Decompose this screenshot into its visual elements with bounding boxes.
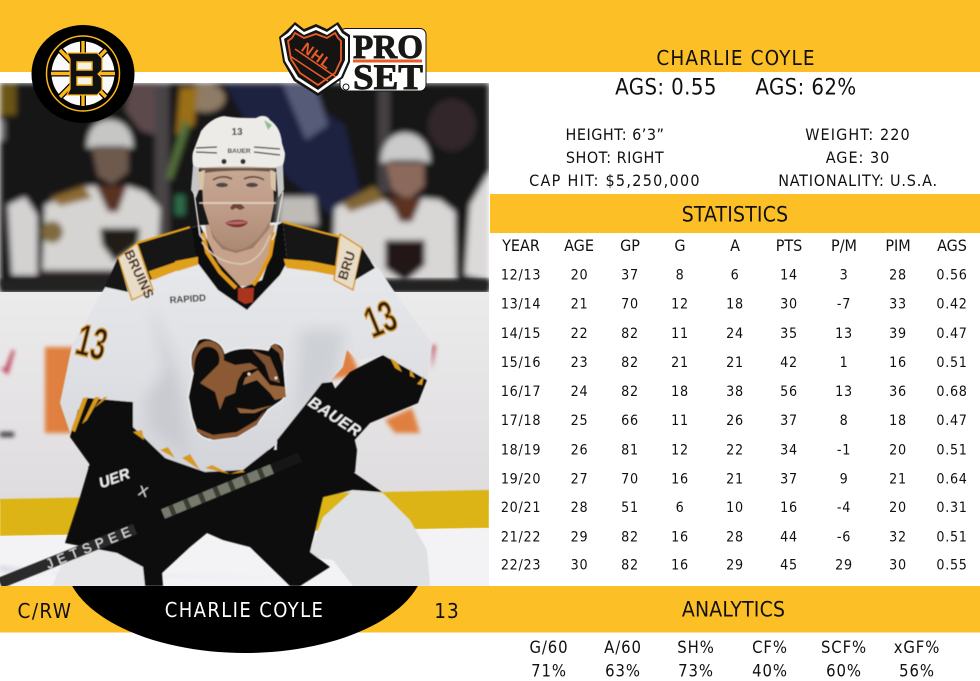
table rows: 15/16 [501,355,541,371]
table rows: 21 [726,472,744,488]
table rows: 9 [840,472,848,488]
table rows: 21 [726,355,744,371]
table rows: 13 [835,384,853,400]
orange rule [353,60,422,62]
helmet number: 13 [231,127,243,138]
analytics values: A/60 [604,638,642,657]
table rows: 29 [571,530,588,546]
yoke gold stripes [137,222,340,279]
boards adverts [0,345,436,437]
table rows: -6 [837,530,851,546]
cage straps [194,192,283,240]
table rows: 29 [726,558,744,574]
table rows: 26 [571,442,588,458]
table rows: 37 [780,413,798,429]
table rows: 0.51 [936,530,968,546]
table header: PIM [885,236,911,255]
table rows: 6 [731,268,739,284]
table header: PTS [776,236,802,255]
collar gold trim [203,232,274,288]
table rows: 82 [621,355,639,371]
table rows: 22 [571,326,588,342]
right glove [276,382,358,474]
stick brand: JETSPEE [44,524,133,572]
table rows: 16 [889,355,907,371]
table rows: 0.51 [936,442,968,458]
table rows: 14/15 [501,326,541,342]
headline AGS values: AGS: 0.55 [615,76,717,100]
face [198,165,276,253]
table rows: 25 [571,413,588,429]
table rows: 29 [835,558,853,574]
table rows: 8 [676,268,684,284]
hockey stick [0,457,300,583]
boards [0,292,489,502]
table rows: 18 [889,413,907,429]
table rows: 28 [889,268,907,284]
table rows: 30 [571,558,588,574]
neck [205,225,275,286]
table header: AGE [564,236,594,255]
table rows: 70 [621,296,639,312]
sleeve number right: 13 [357,291,404,348]
table rows: 42 [780,355,798,371]
table rows: 70 [621,472,639,488]
table rows: 3 [840,268,848,284]
blurred teammate right [381,133,430,163]
table rows: 18 [671,384,689,400]
analytics values: SH% [677,638,715,657]
table rows: 20 [571,268,588,284]
helmet brand: BAUER [227,148,251,155]
table header: YEAR [501,236,540,255]
player bio left: SHOT: RIGHT [566,148,664,167]
sleeve number left: 13 [71,314,112,370]
yellow kick plate [0,490,489,536]
position label: C/RW [18,599,72,623]
registered mark [343,84,349,90]
collar black [190,222,287,310]
player bio left [529,125,701,190]
SET wordmark: SET [353,57,423,97]
table header: G [674,236,686,255]
jersey shading [146,328,344,446]
statistics heading: STATISTICS [682,202,788,226]
player bio left: CAP HIT: $5,250,000 [529,171,701,190]
table rows: 37 [621,268,639,284]
analytics values: SCF% [821,638,867,657]
table rows: 12/13 [501,268,541,284]
player figure: X [137,482,151,500]
player name heading: CHARLIE COYLE [656,46,816,70]
jersey [60,222,432,473]
table rows: 0.51 [936,355,968,371]
white pants left [52,549,146,586]
table rows: 0.55 [936,558,968,574]
bottom yellow band [0,586,980,632]
table rows: 8 [840,413,848,429]
player bio right: AGE: 30 [826,148,890,167]
team logo: Boston Bruins [32,25,134,123]
table header [501,236,967,255]
jersey hem stripes [144,438,276,475]
white pants right [307,490,430,586]
bear crest [188,338,286,440]
table rows: 0.68 [936,384,968,400]
glove brand right: BAUER [305,394,364,441]
analytics values: 60% [826,662,862,680]
table rows: 20 [889,500,907,516]
Pro Set logo [279,22,426,97]
table rows: 18/19 [501,442,541,458]
table rows: 38 [726,384,744,400]
table rows: 11 [671,413,689,429]
black pants [65,450,382,586]
table rows: 27 [571,472,588,488]
analytics values: xGF% [894,638,940,657]
right shoulder yoke [283,222,340,268]
table rows: 37 [780,472,798,488]
table rows: 0.64 [936,472,968,488]
ice [0,528,489,586]
table rows: 32 [889,530,907,546]
top yellow band [0,0,980,72]
dark dasher rail [0,279,489,293]
table rows: 21 [889,472,907,488]
table rows: 39 [889,326,907,342]
table rows: 11 [671,326,689,342]
table rows: 30 [889,558,907,574]
table header: A [730,236,740,255]
table rows: 66 [621,413,639,429]
bear brown face [200,360,258,410]
table rows: 20/21 [501,500,541,516]
table header: P/M [831,236,857,255]
analytics values: 73% [678,662,714,680]
table rows: 82 [621,384,639,400]
analytics values [530,638,940,680]
table rows: 17/18 [501,413,541,429]
table rows: 51 [621,500,639,516]
table rows: 14 [780,268,798,284]
table rows: 26 [726,413,744,429]
PRO wordmark: PRO [353,29,423,66]
table rows: 82 [621,326,639,342]
analytics values: CF% [752,638,788,657]
table rows: 0.47 [936,413,968,429]
table rows: 6 [676,500,684,516]
table rows: 23 [571,355,588,371]
statistics band [490,194,980,233]
table rows: 0.47 [936,326,968,342]
sponsor patch: RAPIDD [169,293,207,306]
table rows: 24 [571,384,588,400]
player bio right: WEIGHT: 220 [805,125,911,144]
right arm sleeve black [334,354,428,440]
player name on arc: CHARLIE COYLE [165,598,324,622]
table rows: -1 [837,442,851,458]
player photo [0,83,489,586]
table rows: 35 [780,326,798,342]
right shoulder patch [334,234,362,290]
black name arc [65,467,425,653]
player figure [0,116,432,586]
table rows: 44 [780,530,798,546]
table rows: 21 [671,355,689,371]
table rows: 10 [726,500,744,516]
table rows: 28 [726,530,744,546]
photo background: crowd and teammates [0,83,489,288]
table rows: 36 [889,384,907,400]
jersey number: 13 [434,599,460,623]
logo plate [340,28,426,91]
bear jaw trim [192,410,265,440]
left shoulder yoke [137,227,197,280]
analytics values: 63% [605,662,641,680]
headline AGS values: AGS: 62% [755,76,857,100]
left shoulder patch: BRUINS [121,247,157,301]
table rows: 56 [780,384,798,400]
table rows: 18 [726,296,744,312]
analytics values: G/60 [530,638,568,657]
analytics values: 71% [531,662,567,680]
statistics table [501,236,968,574]
table rows: 19/20 [501,472,541,488]
table rows: 81 [621,442,639,458]
table rows: 28 [571,500,588,516]
NHL shield [279,22,350,96]
NHL collar crest [238,288,254,304]
Bruins B mark [67,53,102,95]
analytics values: 56% [899,662,935,680]
headline AGS values [615,76,857,100]
table rows: 12 [671,442,689,458]
table rows: 0.56 [936,268,968,284]
table rows: 16 [671,472,689,488]
table rows: 45 [780,558,798,574]
glove brand left: UER [97,465,132,492]
analytics values: 40% [752,662,788,680]
bear ear [192,341,224,372]
table rows: 16 [780,500,798,516]
right shoulder patch: BRU [335,249,358,282]
table rows: 33 [889,296,907,312]
table rows: 16/17 [501,384,541,400]
player bio left: HEIGHT: 6’3” [566,125,664,144]
table header: GP [620,236,640,255]
table rows: 1 [840,355,848,371]
blurred teammate left [87,120,133,148]
table rows: 34 [780,442,798,458]
table rows: 20 [889,442,907,458]
NHL letters: NHL [298,40,335,73]
player bio right: NATIONALITY: U.S.A. [778,171,938,190]
left glove [88,466,149,530]
table rows: 0.31 [936,500,968,516]
left arm sleeve black [69,398,159,465]
table rows: 22 [726,442,744,458]
table rows: 82 [621,558,639,574]
table rows: -4 [837,500,851,516]
table rows: -7 [837,296,851,312]
table rows [501,268,968,574]
table rows: 13/14 [501,296,541,312]
table rows: 82 [621,530,639,546]
analytics heading: ANALYTICS [682,598,785,622]
table rows: 21 [571,296,588,312]
helmet [191,116,285,198]
table rows: 13 [835,326,853,342]
table rows: 0.42 [936,296,968,312]
table rows: 21/22 [501,530,541,546]
table rows: 30 [780,296,798,312]
table rows: 24 [726,326,744,342]
player bio right [778,125,938,190]
table rows: 16 [671,530,689,546]
table rows: 12 [671,296,689,312]
table rows: 22/23 [501,558,541,574]
table rows: 16 [671,558,689,574]
table header: AGS [937,236,967,255]
